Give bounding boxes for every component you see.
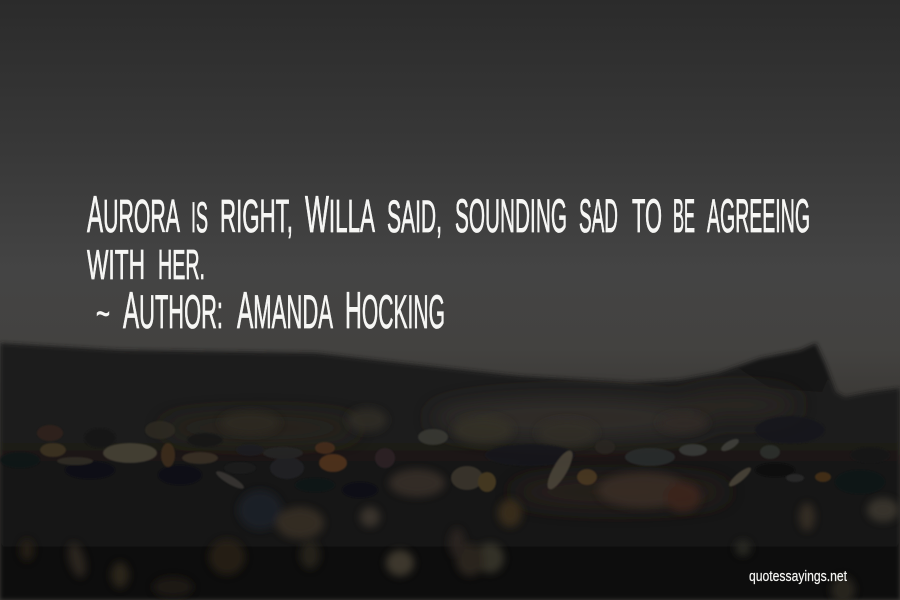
quote line 1: RIGHT, bbox=[220, 190, 293, 242]
background: soft foreground pebbles bbox=[20, 408, 899, 600]
quote line 1: BE bbox=[673, 189, 695, 242]
author attribution: AUTHOR: bbox=[123, 282, 223, 340]
quote text: HER. bbox=[158, 241, 205, 288]
quote line 1: SAD bbox=[579, 189, 618, 242]
background: large soft ground tones bbox=[160, 391, 800, 506]
background: distant hills and headland bbox=[0, 343, 900, 600]
author attribution: ~ bbox=[96, 293, 110, 334]
author attribution bbox=[96, 282, 445, 340]
quote line 1: SAID, bbox=[387, 191, 442, 242]
quote line 2: WITH bbox=[87, 241, 145, 288]
quote text bbox=[87, 186, 810, 288]
quote line 1: SOUNDING bbox=[455, 189, 567, 242]
quote line 1: WILLA bbox=[305, 186, 375, 244]
background: mid-ground pebbles bbox=[0, 416, 890, 498]
author attribution: AMANDA bbox=[237, 282, 333, 340]
text: HOCKING bbox=[345, 282, 445, 340]
quote line 1: TO bbox=[632, 189, 662, 242]
watermark: quotessayings.net bbox=[749, 568, 848, 585]
quote line 1 bbox=[87, 186, 810, 244]
quote line 1: IS bbox=[191, 194, 208, 242]
quote line 1: AURORA bbox=[87, 186, 180, 244]
